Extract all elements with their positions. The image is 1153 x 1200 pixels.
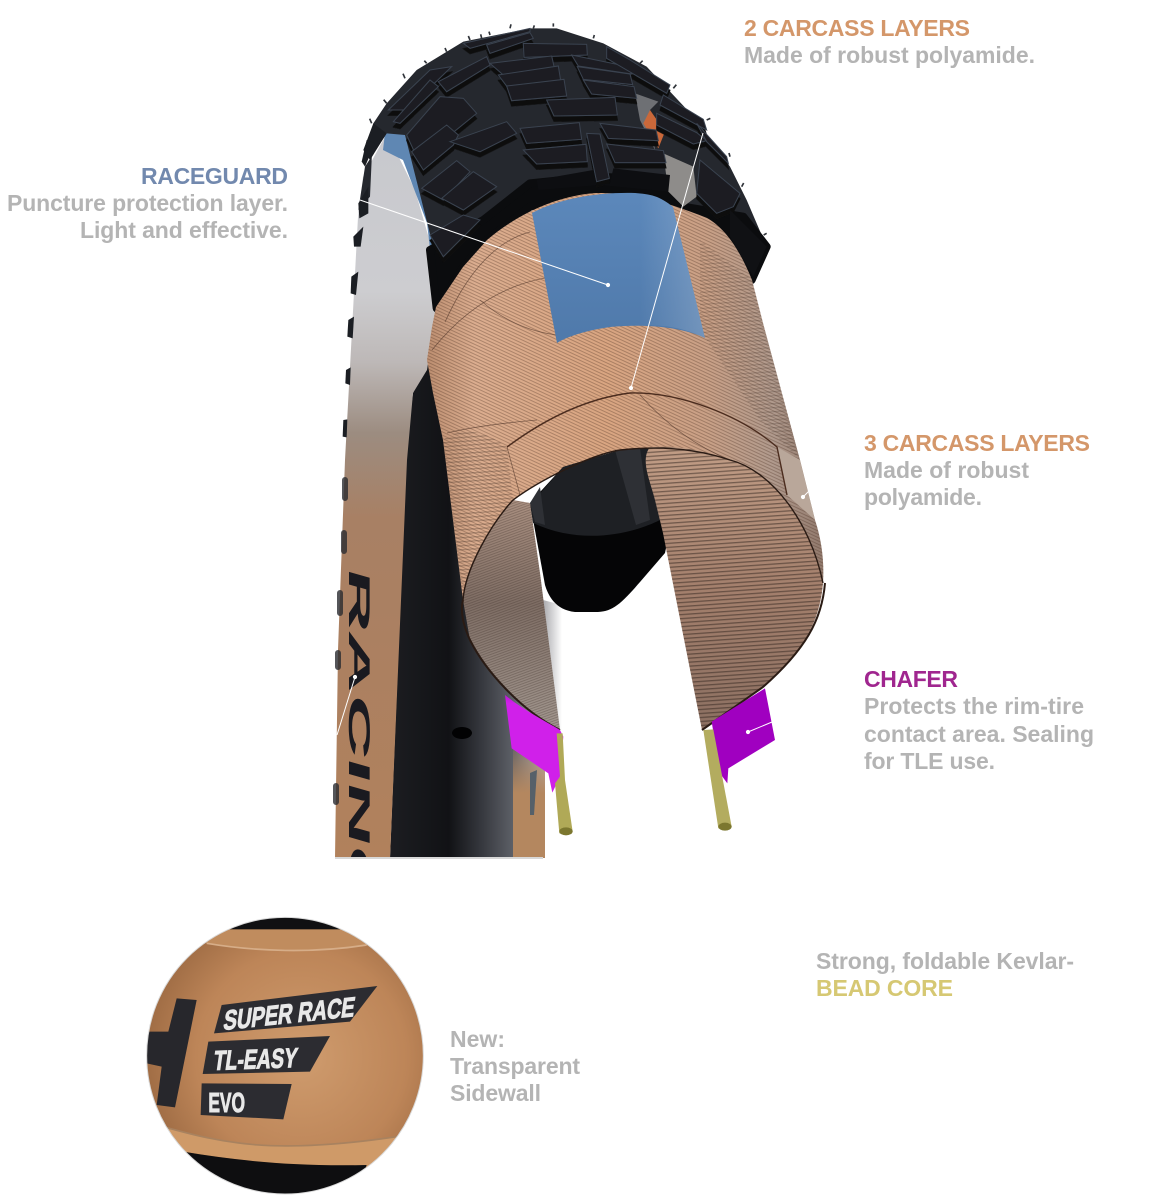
seam lines [432, 232, 730, 495]
label: bead core [816, 948, 1074, 1001]
badge: tl-easy: TL-EASY [212, 1042, 299, 1076]
label: bead core: Strong, foldable Kevlar- [816, 948, 1074, 974]
sidewall close-up circle [140, 910, 433, 1200]
label: 3 carcass layers: polyamide. [864, 484, 982, 510]
bead core right [703, 729, 732, 831]
badge: evo: EVO [208, 1087, 245, 1118]
lower bead strip [168, 1129, 396, 1167]
label: chafer: for TLE use. [864, 748, 995, 774]
inner left band [463, 500, 560, 730]
label: raceguard: Puncture protection layer. [7, 190, 288, 216]
tire illustration [335, 23, 825, 919]
upper bead strip [206, 929, 366, 950]
label: chafer: contact area. Sealing [864, 721, 1094, 747]
label: transparent sidewall: New: [450, 1026, 505, 1052]
inner right band [646, 447, 823, 730]
label: raceguard: RACEGUARD [141, 163, 288, 189]
chafer right [712, 688, 775, 783]
floor line [335, 857, 543, 859]
label: 3 carcass layers: Made of robust [864, 457, 1029, 483]
label: raceguard: Light and effective. [80, 217, 288, 243]
label: transparent sidewall [450, 1026, 580, 1106]
carcass layers, outer band [427, 193, 823, 600]
label: 2 carcass layers: 2 CARCASS LAYERS [744, 15, 970, 41]
rear sidewall and rim [335, 130, 562, 919]
interior background [530, 447, 680, 612]
label: 3 carcass layers: 3 CARCASS LAYERS [864, 430, 1090, 456]
rear sidewall and rim: RACING [342, 564, 375, 919]
bead core left [555, 733, 573, 835]
label: chafer [864, 666, 1094, 774]
label: 2 carcass layers: Made of robust polyamide. [744, 42, 1035, 68]
badge: super race: SUPER RACE [222, 991, 357, 1036]
badge: evo [201, 1083, 292, 1119]
sidewall lettering fragment [147, 998, 197, 1107]
interior grey rim channel [530, 447, 663, 536]
chafer left [505, 695, 563, 793]
label: transparent sidewall: Transparent [450, 1053, 580, 1079]
label: transparent sidewall: Sidewall [450, 1080, 541, 1106]
label: bead core: BEAD CORE [816, 975, 953, 1001]
label: 2 carcass layers [744, 15, 1035, 68]
lip edge [462, 583, 825, 730]
raceguard patch [532, 193, 705, 343]
label: chafer: CHAFER [864, 666, 958, 692]
tread [343, 23, 767, 437]
leader lines [337, 133, 809, 735]
label: chafer: Protects the rim-tire [864, 693, 1084, 719]
label: raceguard [7, 163, 288, 243]
label: 3 carcass layers [864, 430, 1090, 510]
